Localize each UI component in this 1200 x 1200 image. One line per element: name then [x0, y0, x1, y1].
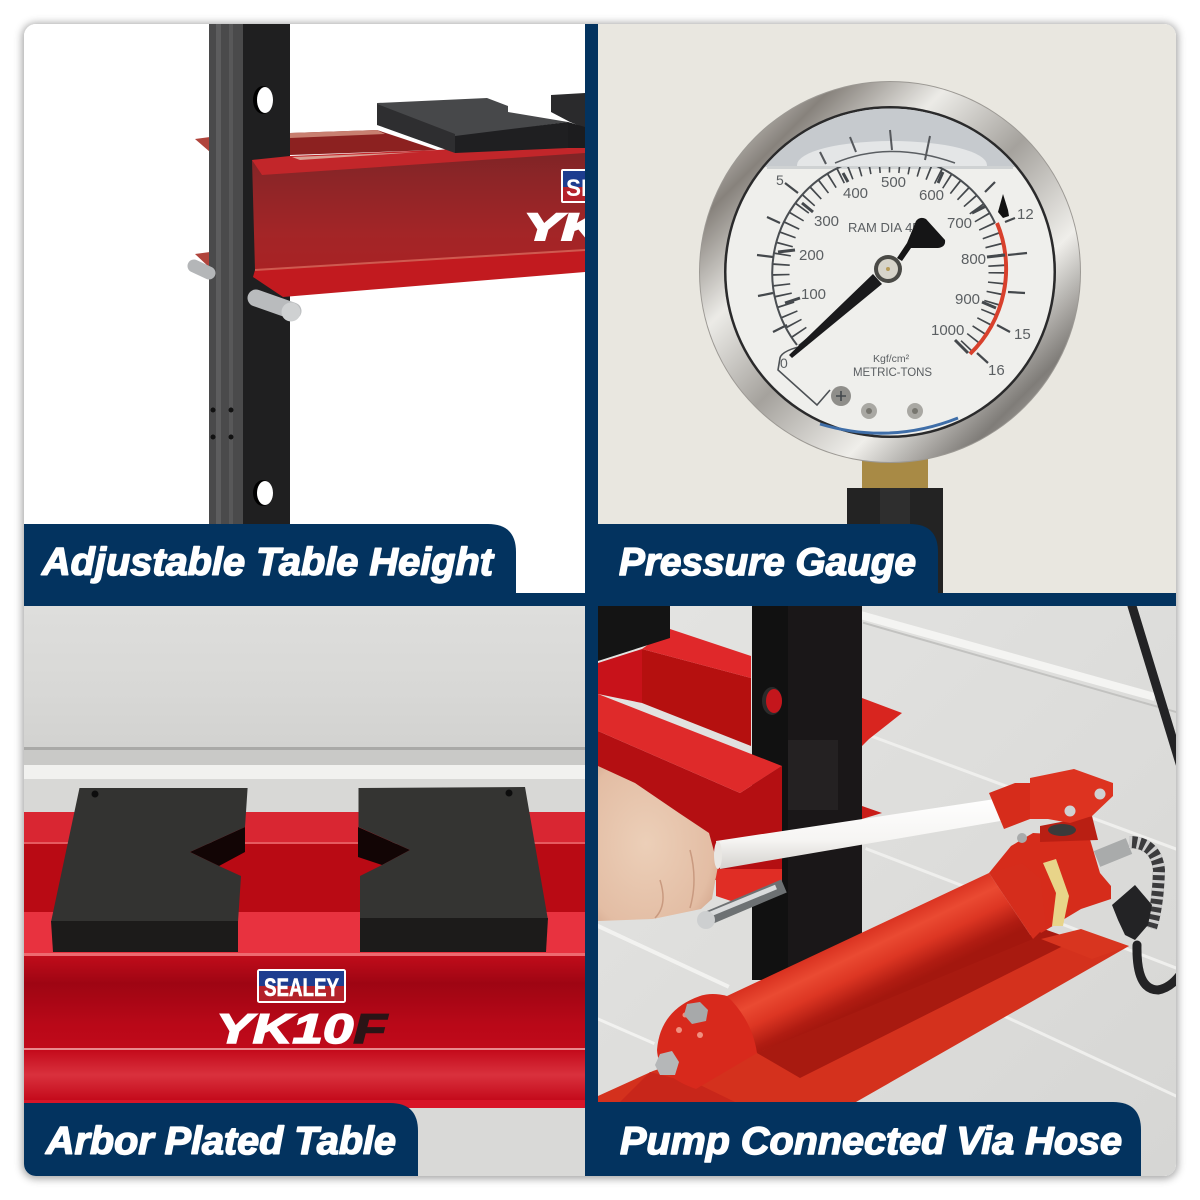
- rear left beam tabs: [195, 137, 210, 268]
- gauge stem: [847, 455, 943, 598]
- label: adjustable table height: [24, 524, 516, 593]
- label: arbor plated table: [24, 1103, 418, 1176]
- minor ticks: [781, 164, 997, 380]
- model text crop: YK: [524, 207, 606, 249]
- label: pump connected via hose: [585, 1102, 1141, 1176]
- bourdon line and screws: [778, 345, 923, 419]
- panel: arbor plated table: [24, 606, 585, 1176]
- scale numbers: 900: [955, 291, 980, 308]
- model name: YK10 F: [216, 1005, 389, 1052]
- panel: pump connected via hose: [598, 606, 1182, 1176]
- gauge: [699, 81, 1081, 463]
- label: pressure gauge: Pressure Gauge: [619, 541, 916, 584]
- scale numbers: 600: [919, 187, 944, 204]
- arbor plates: [51, 787, 548, 952]
- scale numbers: 1000: [931, 322, 964, 339]
- pump handle: [714, 800, 1000, 869]
- label: arbor plated table: Arbor Plated Table: [45, 1120, 396, 1163]
- locking pins: [194, 266, 300, 322]
- scale numbers: 400: [843, 185, 868, 202]
- red table top: [24, 812, 585, 954]
- scale numbers: RAM DIA 45: [848, 220, 920, 235]
- scale numbers: 800: [961, 251, 986, 268]
- sealey logo: SEALEY: [264, 974, 339, 1002]
- scale numbers: 300: [814, 213, 839, 230]
- red zone: [970, 223, 1006, 354]
- major ticks: [757, 172, 1027, 363]
- scale numbers: 12: [1017, 206, 1034, 223]
- wall panels: [598, 616, 1176, 1096]
- liquid crescent: [764, 108, 1016, 167]
- pump cylinder: [655, 859, 1069, 1089]
- scale numbers: Kgf/cm²: [873, 353, 910, 365]
- sealey logo: [257, 969, 346, 1003]
- scale numbers: 15: [1014, 326, 1031, 343]
- table beam: [252, 130, 585, 297]
- blue reflection: [820, 418, 958, 433]
- steel pin: [697, 886, 784, 929]
- sealey logo crop: SE: [566, 175, 596, 202]
- scale numbers: 700: [947, 215, 972, 232]
- table front face: [24, 953, 585, 1108]
- panel: pressure gauge: [598, 24, 1176, 598]
- panel: adjustable table height: [188, 24, 585, 524]
- hose: [1132, 606, 1182, 990]
- small max pointer: [998, 194, 1009, 218]
- scale numbers: METRIC-TONS: [853, 367, 932, 379]
- hand: [598, 766, 718, 921]
- label: adjustable table height: Adjustable Table Height: [41, 541, 495, 584]
- arbor plates: [377, 93, 585, 153]
- release knob: [1112, 885, 1152, 940]
- pump head: [989, 769, 1113, 933]
- scale numbers: 100: [801, 286, 826, 303]
- needle: [789, 218, 945, 358]
- base plate: [598, 929, 1129, 1102]
- window line: [767, 166, 1013, 169]
- press column: [752, 606, 862, 980]
- scale numbers: [776, 172, 1034, 379]
- scale numbers: 5: [776, 172, 784, 188]
- scale arc: [772, 156, 995, 345]
- sealey logo crop: [561, 169, 585, 203]
- pump foot: [1041, 929, 1129, 947]
- hose fitting: [1097, 842, 1159, 928]
- scale numbers: 16: [988, 362, 1005, 379]
- label: pump connected via hose: Pump Connected Via Hose: [620, 1120, 1122, 1163]
- rear beam: [598, 606, 902, 819]
- scale numbers: 0: [780, 355, 788, 371]
- scale numbers: 200: [799, 247, 824, 264]
- scale numbers: 500: [881, 174, 906, 191]
- front beam: [598, 694, 782, 904]
- steel column: [209, 24, 290, 524]
- label: pressure gauge: [585, 524, 938, 593]
